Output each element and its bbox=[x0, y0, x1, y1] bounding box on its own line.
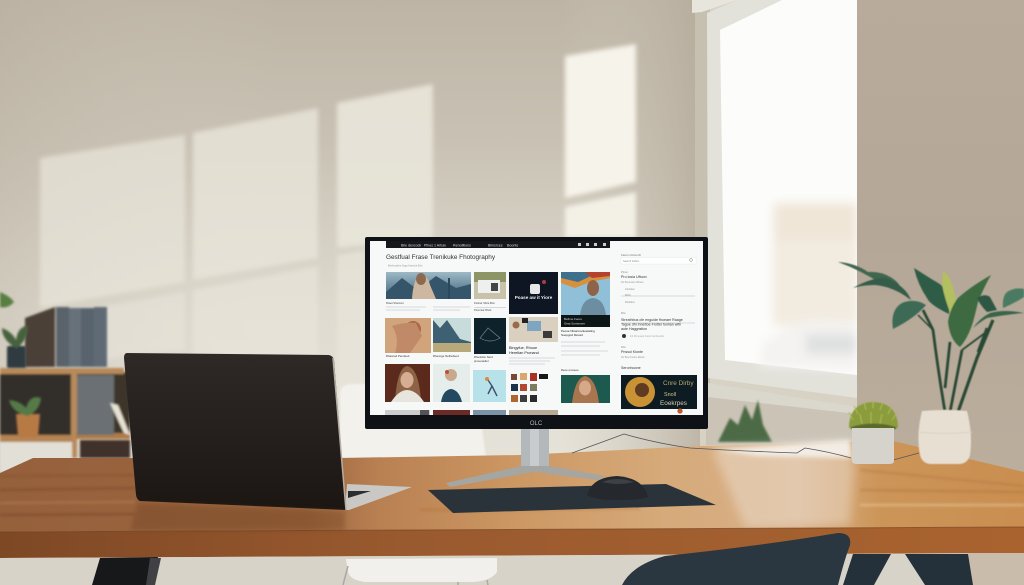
photo tile: woman on green bbox=[561, 368, 610, 403]
potted plants on shelf bbox=[0, 292, 41, 437]
photo tile: woman portrait bbox=[385, 364, 430, 402]
mouse bbox=[587, 476, 648, 500]
screen: Heretlan Pronand bbox=[509, 351, 539, 355]
photo tile: person under coloured stripes: Geat Sortenwer bbox=[564, 322, 585, 326]
captions row one: Poonntar Rhoit bbox=[474, 308, 492, 312]
dark front chair bbox=[622, 533, 850, 585]
sidebar promo image: Cnre Dirby bbox=[663, 380, 694, 387]
captions row one: Kottnar Sbrte Brei bbox=[474, 301, 495, 305]
floor bbox=[0, 553, 1024, 585]
window frame and glass bbox=[692, 0, 857, 414]
captions row two: prosenadior bbox=[474, 359, 489, 363]
right wall bbox=[857, 0, 1024, 480]
nav bar: Bilnsrces bbox=[488, 244, 503, 248]
nav bar: Bile devcock bbox=[401, 244, 421, 248]
laptop bbox=[124, 353, 412, 510]
sidebar bbox=[621, 253, 696, 370]
leaves bbox=[838, 262, 911, 300]
sidebar: Pitle bbox=[621, 312, 626, 315]
captions row two: Rhenidon Nerd bbox=[474, 355, 493, 359]
captions row one: Suopgnd Moosd bbox=[561, 333, 583, 337]
sidebar: Streathbus cfe enguide fhoeaer Raage bbox=[621, 318, 683, 322]
photo tile: person under coloured stripes: Befime Faore bbox=[564, 317, 582, 321]
captions row two: Rhaoced Perofeed bbox=[386, 354, 410, 358]
monitor brand: OLC bbox=[530, 421, 543, 427]
grey storage box bbox=[77, 375, 114, 435]
photo tile: woman on green: Reoe eroveoe bbox=[561, 368, 579, 372]
sidebar: Dnohfers bbox=[625, 301, 636, 304]
photo tile: dark shape bbox=[474, 318, 506, 354]
large plant bbox=[838, 262, 1024, 464]
screen: Brefmadiee Iloga Hanslut Erio bbox=[388, 264, 423, 268]
glare on desk bbox=[712, 439, 855, 528]
captions row one bbox=[386, 301, 595, 337]
sidebar promo image bbox=[621, 375, 697, 414]
sunlight patches on wall bbox=[40, 44, 636, 400]
sidebar: Ro Bnsonarre Rlitsen bbox=[621, 281, 644, 284]
white paper on shelf bbox=[110, 403, 130, 435]
sidebar: Search Fabric bbox=[623, 259, 640, 263]
power cable bbox=[572, 434, 919, 460]
photo tile: devices bbox=[474, 272, 506, 299]
photo tile: workspace collage bbox=[509, 317, 558, 342]
photo tile: illustration bbox=[473, 370, 506, 402]
wooden shelf unit bbox=[0, 368, 130, 472]
sidebar: aute Haggnstion bbox=[621, 327, 647, 331]
sidebar promo image: Snoll bbox=[664, 392, 676, 398]
article heading: Bingyfue, Rhoue bbox=[509, 346, 537, 350]
white chair seat under desk bbox=[343, 558, 497, 585]
back wall bbox=[0, 0, 700, 480]
sidebar: Rinfo bbox=[625, 294, 631, 297]
binders on shelf bbox=[25, 307, 107, 367]
icon grid tile bbox=[511, 373, 548, 402]
monitor bbox=[365, 237, 708, 429]
sidebar: Pro losia Uftoon bbox=[621, 275, 647, 279]
photo tile: mountains with person bbox=[386, 272, 471, 299]
photo tile: person under coloured stripes bbox=[561, 272, 610, 327]
desk legs bbox=[92, 554, 973, 585]
sidebar: Cornoten bbox=[625, 288, 636, 291]
sidebar: Pitle bbox=[621, 346, 626, 349]
sidebar: Tagoe dhi Innettoe Frotter funlian with bbox=[621, 322, 681, 326]
wood grain bbox=[0, 470, 1024, 515]
nav bar: Plhes 1 Artule bbox=[424, 244, 446, 248]
nav bar: Renotitions bbox=[453, 244, 471, 248]
desk bbox=[0, 439, 1024, 558]
photo tile: dark poster bbox=[509, 272, 558, 314]
white pot bbox=[918, 410, 971, 464]
nav bar: Boonte bbox=[507, 244, 518, 248]
blurred plant on window sill bbox=[718, 400, 772, 442]
mouse pad bbox=[428, 484, 716, 513]
laptop reflection on desk bbox=[130, 503, 345, 530]
stems bbox=[918, 310, 993, 412]
wall below window bbox=[706, 397, 857, 445]
screen bbox=[370, 241, 703, 415]
page title: Gestfual Frase Trenikuke Fhotography bbox=[386, 254, 496, 261]
sidebar: Pnssol Klonte bbox=[621, 350, 643, 354]
captions row two: Rhenoge Nethefieed bbox=[433, 354, 459, 358]
white chair back behind desk bbox=[340, 384, 486, 458]
nav bar bbox=[386, 241, 610, 248]
sidebar: Intl Mnnosesi Foote Sonthesidio bbox=[630, 335, 665, 338]
captions row one: Peose Nfoarmarkoelating bbox=[561, 329, 595, 333]
sidebar: Ro Brenomarre Ellean bbox=[621, 356, 645, 359]
photo tile: mountain landscape bbox=[433, 318, 471, 352]
sidebar promo image: Eoekrpes bbox=[660, 400, 687, 407]
captions row one: Fbaot Sharcont bbox=[386, 301, 404, 305]
sidebar: Fasron Rostorift bbox=[621, 253, 641, 257]
monitor stand bbox=[446, 429, 605, 487]
sidebar: Serorinoone bbox=[621, 366, 641, 370]
small pot with grass bbox=[849, 400, 898, 464]
sidebar: Primo bbox=[621, 270, 628, 274]
bottom row tiles bbox=[385, 410, 558, 415]
photo tile: tan portrait bbox=[385, 318, 431, 353]
photo tile: flower-head figure bbox=[433, 364, 470, 402]
photo tile: dark poster: Poase aw it Yiore bbox=[515, 295, 553, 300]
view through window bbox=[760, 203, 857, 370]
caption placeholder lines bbox=[386, 296, 695, 364]
captions row two bbox=[386, 354, 493, 363]
